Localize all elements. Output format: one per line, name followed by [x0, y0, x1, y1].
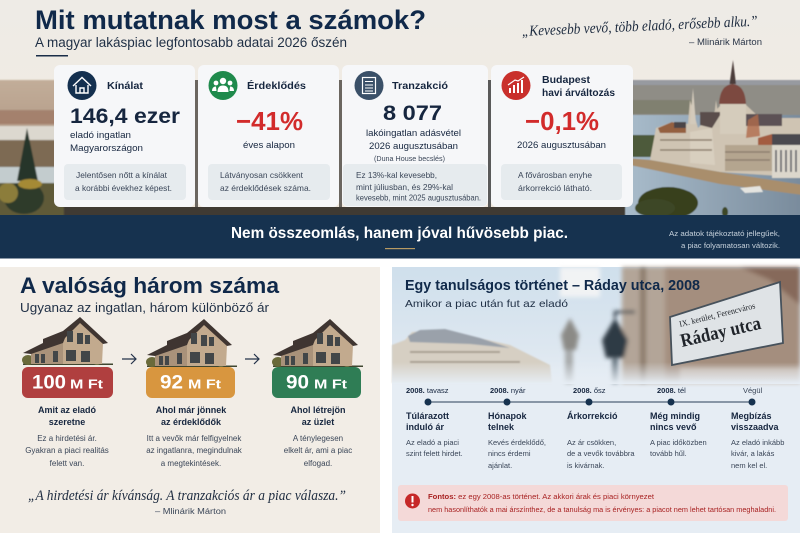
heading: A valóság három száma: [20, 273, 280, 298]
callout: warning: nem hasonlíthatók a mai árszínthez, de a tanulság ma is érvényes: a piacot nem lehet tartósan meghaladni.: [428, 507, 776, 514]
card: Budapest havi árváltozás: −0,1%: [525, 106, 599, 136]
step: árkorrekció: [567, 386, 635, 470]
card: Budapest havi árváltozás: havi árváltozás: [542, 88, 615, 99]
note box: A fővárosban enyhe: [518, 171, 592, 180]
icon: exclamation: [405, 494, 420, 508]
house: deal price: [272, 319, 363, 367]
step: hónapok telnek: nincs érdemi: [488, 449, 531, 458]
column: seller: [25, 405, 109, 468]
column: deal: A ténylegesen: [293, 434, 343, 443]
price badge: 90 M Ft: M Ft: [314, 378, 348, 392]
note box: Ez 13%-kal kevesebb,: [356, 171, 437, 180]
banner: key message: [0, 215, 800, 258]
icon: bar chart: [502, 71, 530, 100]
price badge: 100 M Ft: M Ft: [70, 378, 104, 392]
panel: Ráday utca story: [392, 267, 800, 533]
card: Érdeklődés: −41%: [236, 106, 303, 136]
column: deal: Ahol létrejön: [290, 405, 346, 415]
card: Budapest havi árváltozás: Budapest: [542, 75, 591, 86]
column: interested buyers: a megtekintések.: [161, 459, 221, 468]
step: megbízás visszaadva: visszaadva: [731, 422, 780, 432]
column: interested buyers: az érdeklődők: [161, 417, 222, 427]
card: Kínálat: 146,4 ezer: [70, 104, 181, 128]
card: Budapest havi árváltozás: [491, 65, 633, 207]
price badge: 90 M Ft: [272, 367, 361, 398]
card: Tranzakció: [342, 65, 488, 207]
card: Kínálat: Magyarországon: [70, 143, 143, 153]
note box: mint júliusban, és 29%-kal: [356, 183, 453, 192]
column: interested buyers: [146, 405, 243, 468]
card: Tranzakció: 2026 augusztusában: [369, 141, 458, 151]
panel: A valóság három száma: [0, 267, 380, 533]
photo: street with sign: [392, 267, 800, 384]
callout: warning: [398, 485, 788, 521]
note box: [64, 164, 186, 200]
step: még mindig nincs vevő: 2008. tél: [657, 386, 686, 395]
icon: house: [68, 71, 96, 100]
price badge: 100 M Ft: [22, 367, 113, 398]
column: deal: az üzlet: [302, 417, 334, 427]
quote: top: – Mlinárik Márton: [689, 37, 762, 47]
step: még mindig nincs vevő: [650, 386, 707, 458]
arrow: [122, 354, 136, 364]
step: megbízás visszaadva: [731, 386, 784, 470]
step: túlárazott: Az eladó a piaci: [406, 438, 459, 447]
step: hónapok telnek: ajánlat.: [488, 461, 512, 470]
house: interest price: [146, 319, 237, 367]
accent line: [36, 55, 68, 56]
timeline: [424, 398, 756, 406]
column: seller: szeretne: [49, 417, 85, 427]
step: hónapok telnek: Kevés érdeklődő,: [488, 438, 546, 447]
price badge: 92 M Ft: M Ft: [188, 378, 222, 392]
icon: people: [208, 71, 238, 100]
card: Kínálat: Kínálat: [107, 81, 144, 92]
column: seller: felett van.: [50, 459, 84, 468]
card: Kínálat: eladó ingatlan: [70, 130, 131, 140]
note box: a korábbi évekhez képest.: [75, 184, 172, 193]
step: még mindig nincs vevő: A piac időközben: [650, 438, 707, 447]
step: megbízás visszaadva: Megbízás: [731, 411, 772, 421]
note box: [501, 164, 622, 200]
banner: key message: Az adatok tájékoztató jellegűek,: [669, 229, 780, 238]
step: árkorrekció: 2008. ősz: [573, 386, 606, 395]
step: túlárazott: Túlárazott: [406, 411, 449, 421]
step: még mindig nincs vevő: nincs vevő: [650, 422, 697, 432]
column: deal: elfogad.: [304, 459, 332, 468]
step: árkorrekció: is kivárnak.: [567, 461, 605, 470]
quote: top: „Kevesebb vevő, több eladó, erősebb alku.”: [521, 14, 758, 40]
card: Érdeklődés: éves alapon: [243, 140, 295, 150]
step: még mindig nincs vevő: tovább hűl.: [650, 449, 687, 458]
step: túlárazott: 2008. tavasz: [406, 386, 449, 395]
banner: key message: Nem összeomlás, hanem jóval hűvösebb piac.: [231, 225, 568, 242]
price badge: 100 M Ft: 100: [32, 372, 66, 394]
heading: main title: Mit mutatnak most a számok?: [35, 5, 426, 35]
quote: [28, 488, 346, 516]
card: Tranzakció: (Duna House becslés): [374, 156, 445, 163]
quote: „A hirdetési ár kívánság. A tranzakciós ár a piac válasza.”: [28, 488, 346, 504]
step: túlárazott: [406, 386, 463, 458]
street sign: Ráday utca: [678, 313, 763, 352]
step: hónapok telnek: telnek: [488, 422, 515, 432]
card: Budapest havi árváltozás: 2026 augusztusában: [517, 140, 606, 150]
step: árkorrekció: Árkorrekció: [567, 411, 618, 421]
photo: Parliament and Danube: [625, 60, 800, 220]
step: hónapok telnek: [488, 386, 546, 470]
column: deal: elkelt ár, ami a piac: [284, 446, 352, 455]
step: megbízás visszaadva: kivár, a lakás: [731, 449, 775, 458]
step: megbízás visszaadva: nem kel el.: [731, 461, 767, 470]
icon: document: [354, 71, 384, 100]
note box: árkorrekció látható.: [518, 184, 592, 193]
heading: Egy tanulságos történet – Ráday utca, 2008: [405, 278, 700, 294]
subheading: Ugyanaz az ingatlan, három különböző ár: [20, 301, 269, 315]
column: deal: [284, 405, 352, 468]
panel: top section background: [0, 0, 800, 258]
column: seller: Ez a hirdetési ár.: [37, 434, 97, 443]
step: túlárazott: szint felett hirdet.: [406, 449, 463, 458]
subtitle: A magyar lakáspiac legfontosabb adatai 2026 őszén: [35, 35, 347, 50]
subheading: Amikor a piac után fut az eladó: [405, 298, 568, 310]
column: seller: Amit az eladó: [38, 405, 97, 415]
card: Tranzakció: 8 077: [383, 101, 442, 125]
note box: [208, 164, 330, 200]
step: megbízás visszaadva: Végül: [743, 386, 763, 395]
step: túlárazott: induló ár: [406, 422, 444, 432]
card: Kínálat: [54, 65, 195, 207]
note box: Látványosan csökkent: [220, 171, 304, 180]
note box: kevesebb, mint 2025 augusztusában.: [356, 194, 481, 202]
price badge: 92 M Ft: [146, 367, 235, 398]
street sign: [670, 282, 783, 365]
house: asking price: [22, 317, 113, 365]
quote: – Mlinárik Márton: [155, 507, 226, 516]
column: interested buyers: az ingatlanra, megindulnak: [146, 446, 243, 455]
price badge: 92 M Ft: 92: [160, 372, 183, 394]
note box: az érdeklődések száma.: [220, 184, 311, 193]
step: árkorrekció: de a vevők továbbra: [567, 449, 635, 458]
step: árkorrekció: Az ár csökken,: [567, 438, 616, 447]
step: megbízás visszaadva: Az eladó inkább: [731, 438, 784, 447]
price badge: 90 M Ft: 90: [286, 372, 309, 394]
street sign: IX. kerület, Ferencváros: [678, 300, 756, 329]
banner: key message: a piac folyamatosan változik.: [681, 241, 780, 250]
card: Érdeklődés: Érdeklődés: [247, 79, 306, 92]
callout: warning: Fontos: ez egy 2008-as történet. Az akkori árak és piaci környezet: [428, 494, 654, 501]
card: Tranzakció: Tranzakció: [392, 81, 448, 92]
photo: Budapest city left: [0, 80, 64, 220]
column: interested buyers: Itt a vevők már felfigyelnek: [147, 434, 242, 443]
note box: Jelentősen nőtt a kínálat: [76, 171, 168, 180]
step: hónapok telnek: 2008. nyár: [490, 386, 526, 395]
card: Érdeklődés: [198, 65, 339, 207]
column: seller: Gyakran a piaci realitás: [25, 446, 109, 455]
card: Tranzakció: lakóingatlan adásvétel: [366, 128, 461, 138]
step: még mindig nincs vevő: Még mindig: [650, 411, 700, 421]
column: interested buyers: Ahol már jönnek: [156, 405, 227, 415]
step: hónapok telnek: Hónapok: [488, 411, 527, 421]
arrow: [245, 354, 259, 364]
note box: [343, 164, 487, 206]
